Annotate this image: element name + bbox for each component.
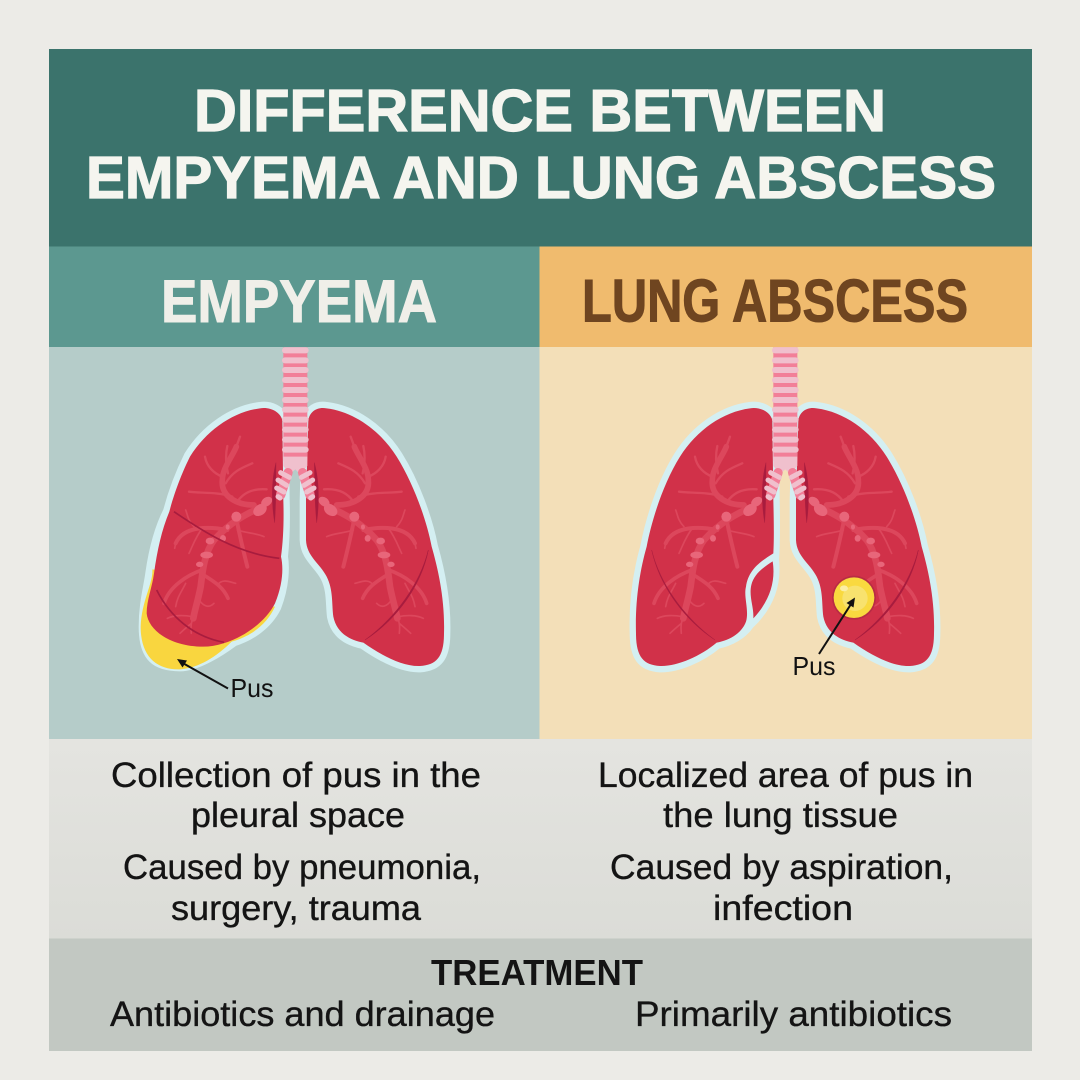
text: lung abscess description: Localized area of pus in xyxy=(598,755,973,795)
title banner xyxy=(49,49,1032,246)
pus label: Pus xyxy=(230,673,274,703)
title: DIFFERENCE BETWEEN xyxy=(194,78,886,144)
column heading: empyema: EMPYEMA xyxy=(161,268,437,335)
pus label: Pus xyxy=(792,651,836,681)
column heading: lung abscess xyxy=(540,246,1032,347)
text: lung abscess description: infection xyxy=(713,888,853,928)
panel: empyema illustration xyxy=(49,347,540,739)
column heading: empyema xyxy=(49,246,540,347)
panel: treatment xyxy=(49,938,1032,1051)
title: EMPYEMA AND LUNG ABSCESS xyxy=(86,145,996,211)
abscess xyxy=(832,576,876,620)
pus arrow xyxy=(819,598,855,654)
treatment heading: TREATMENT xyxy=(431,952,643,993)
panel: lung abscess illustration xyxy=(540,347,1032,739)
lungs with abscess xyxy=(636,347,934,666)
text: lung abscess description: the lung tissue xyxy=(663,795,898,835)
pus arrow xyxy=(177,659,228,688)
text: empyema description: surgery, trauma xyxy=(171,888,421,928)
text: empyema description: Collection of pus in the xyxy=(111,755,481,795)
text: empyema description xyxy=(111,755,481,928)
column heading: lung abscess: LUNG ABSCESS xyxy=(582,268,968,334)
text: empyema description: pleural space xyxy=(191,795,405,835)
panel: descriptions xyxy=(49,739,1032,938)
title xyxy=(86,78,996,211)
treatment: empyema: Antibiotics and drainage xyxy=(110,994,495,1034)
text: empyema description: Caused by pneumonia, xyxy=(123,847,481,887)
text: lung abscess description xyxy=(598,755,973,928)
lungs with pleural pus xyxy=(141,347,444,669)
text: lung abscess description: Caused by aspiration, xyxy=(610,847,953,887)
treatment: lung abscess: Primarily antibiotics xyxy=(635,994,952,1034)
